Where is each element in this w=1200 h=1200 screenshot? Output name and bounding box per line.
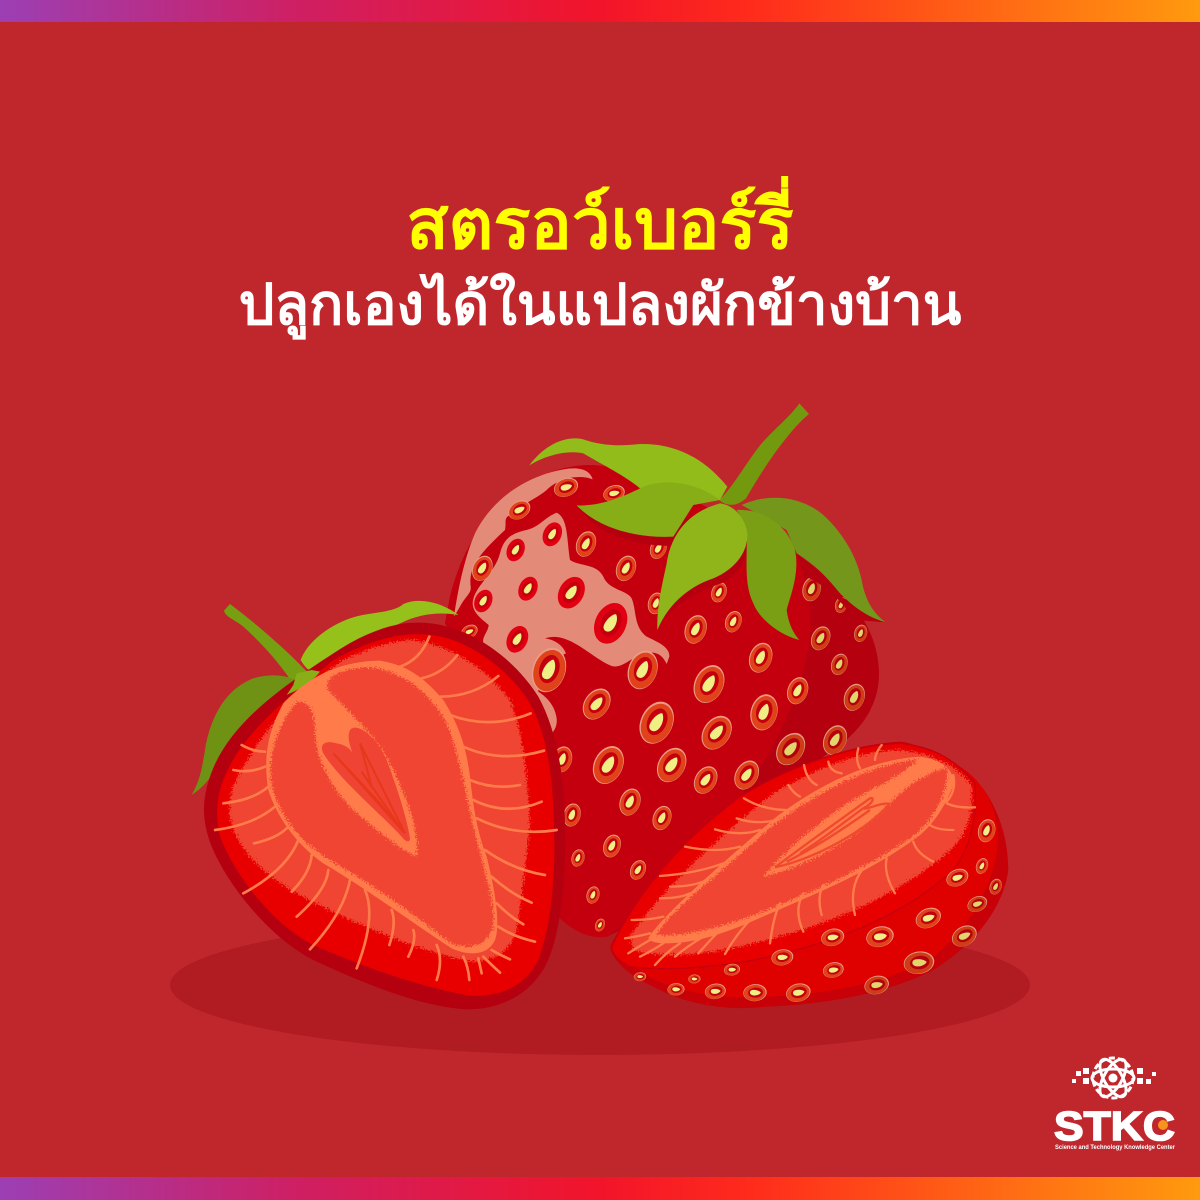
halved red rim — [217, 634, 554, 996]
cut face — [612, 743, 975, 969]
halved heart — [322, 728, 410, 841]
logo tagline: Science and Technology Knowledge Center — [1055, 1145, 1176, 1151]
ground shadow — [170, 915, 1030, 1055]
centre leaf — [737, 510, 799, 640]
logo orange dot — [1158, 1120, 1168, 1130]
middle leaf — [577, 482, 720, 537]
seeds on shaded side — [770, 575, 869, 771]
halved outer skin — [204, 623, 565, 1009]
sliced strawberry — [610, 742, 1008, 1008]
title line 2: ปลูกเองได้ในแปลงผักข้างบ้าน — [239, 272, 962, 340]
seeds on highlight — [471, 519, 634, 656]
highlight large area — [473, 513, 669, 733]
halved spokes — [215, 637, 557, 980]
halved heart lines — [333, 743, 405, 833]
halved flesh — [229, 640, 530, 962]
spokes — [625, 745, 975, 965]
whole strawberry — [445, 403, 886, 937]
title line 1: สตรอว์เบอร์รี่ — [406, 175, 794, 263]
halved stem base — [287, 670, 320, 695]
back leaf — [529, 438, 727, 500]
flesh — [630, 750, 972, 955]
rind underside dark — [610, 742, 1008, 1008]
rind underside light — [613, 763, 998, 997]
halved core flesh — [271, 667, 493, 946]
halved core — [266, 661, 497, 953]
top gradient bar — [0, 0, 1200, 22]
halved left leaf — [192, 675, 295, 795]
highlight top band — [454, 468, 593, 617]
logo pixel dots — [1072, 1068, 1156, 1084]
logo atom icon — [1092, 1055, 1134, 1101]
leaf shadow — [577, 505, 886, 630]
front leaf — [657, 503, 747, 630]
logo: STKC — [1054, 1055, 1176, 1151]
core flesh — [657, 759, 947, 935]
logo wordmark: STKC — [1054, 1103, 1175, 1149]
berry body shadow side — [445, 465, 879, 937]
core — [648, 757, 954, 943]
right leaf — [742, 498, 886, 622]
bottom gradient bar — [0, 1177, 1200, 1200]
slice seeds — [633, 817, 1004, 1005]
stem — [719, 403, 809, 505]
halved upper leaf — [301, 601, 458, 672]
heart core lines — [775, 798, 889, 867]
halved strawberry — [192, 601, 565, 1009]
seeds on body — [459, 474, 812, 933]
halved stem — [224, 604, 310, 687]
title — [239, 175, 962, 340]
berry body lit side — [445, 465, 810, 937]
